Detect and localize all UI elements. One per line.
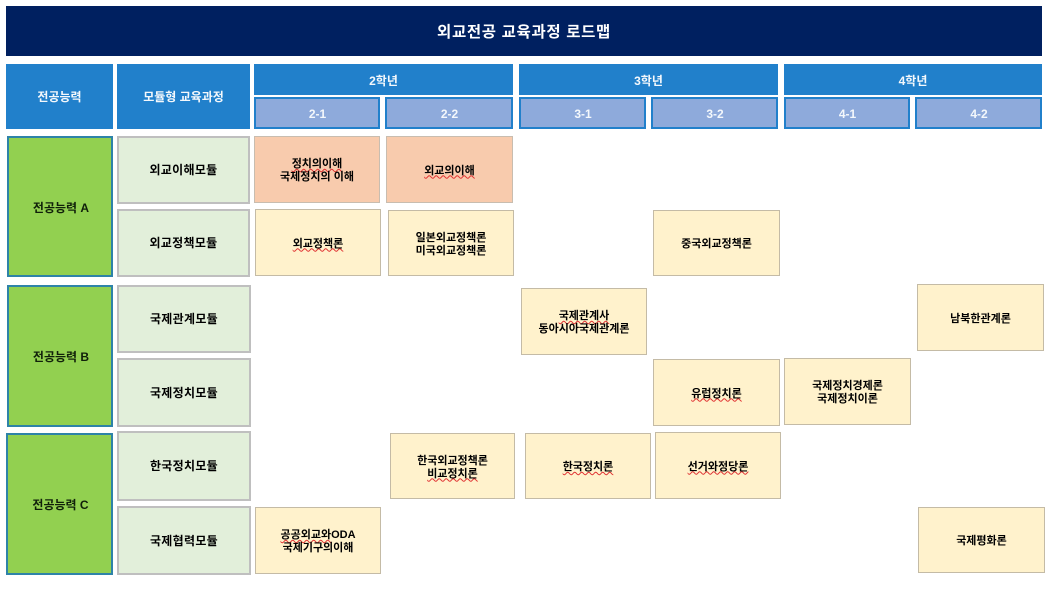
course: 공공외교와ODA / 국제기구의이해: 공공외교와ODA [280,529,356,541]
course: 중국외교정책론 [653,210,780,276]
semester 3-2 [651,97,778,129]
header: 모듈형 교육과정 [117,64,250,129]
course: 일본외교정책론 / 미국외교정책론: 일본외교정책론 [416,232,486,244]
semester 4-1: 4-1 [839,107,856,121]
course: 공공외교와ODA / 국제기구의이해: 국제기구의이해 [283,542,353,554]
course: 선거와정당론: 선거와정당론 [688,460,748,472]
course: 국제정치경제론 / 국제정치이론: 국제정치이론 [817,393,878,405]
semester 4-2: 4-2 [970,107,988,121]
competency C: 전공능력 C [32,498,89,512]
course: 유럽정치론: 유럽정치론 [691,388,742,400]
course: 선거와정당론 [655,432,781,499]
course: 정치의이해 / 국제정치의 이해: 정치의이해 [292,158,342,170]
course: 외교의이해 [386,136,513,203]
course: 외교정책론 [255,209,381,276]
course: 유럽정치론 [653,359,780,426]
header: 전공능력 [6,64,113,129]
title banner [6,6,1042,56]
course: 일본외교정책론 / 미국외교정책론 [388,210,514,276]
course: 한국정치론 [525,433,651,499]
module: 외교정책모듈: 외교정책모듈 [149,236,218,250]
semester 4-1 [784,97,910,129]
semester 2-1 [254,97,380,129]
module: 국제정치모듈: 국제정치모듈 [150,386,218,400]
course: 남북한관계론: 남북한관계론 [950,312,1011,324]
competency B: 전공능력 B [33,350,89,364]
module: 국제협력모듈: 국제협력모듈 [150,534,218,548]
course: 국제관계사 / 동아시아국제관계론 [521,288,647,355]
course: 국제평화론: 국제평화론 [956,535,1007,547]
course: 한국외교정책론 / 비교정치론: 비교정치론 [427,468,478,480]
semester 4-2 [915,97,1042,129]
module: 한국정치모듈 [117,431,251,501]
semester 2-1: 2-1 [309,107,326,121]
header: 3학년: 3학년 [634,74,663,88]
module: 외교이해모듈: 외교이해모듈 [149,163,218,177]
course: 국제정치경제론 / 국제정치이론 [784,358,911,425]
course: 중국외교정책론: 중국외교정책론 [681,238,752,250]
semester 2-2 [385,97,513,129]
course: 남북한관계론 [917,284,1044,351]
module: 국제협력모듈 [117,506,251,575]
module: 외교이해모듈 [117,136,250,204]
semester 3-1: 3-1 [574,107,592,121]
semester 2-2: 2-2 [441,107,458,121]
course: 정치의이해 / 국제정치의 이해: 국제정치의 이해 [280,171,354,183]
course: 공공외교와ODA / 국제기구의이해 [255,507,381,574]
title banner: 외교전공 교육과정 로드맵 [437,24,611,40]
course: 정치의이해 / 국제정치의 이해 [254,136,380,203]
course: 국제관계사 / 동아시아국제관계론: 동아시아국제관계론 [538,323,630,335]
course: 국제평화론 [918,507,1045,573]
course: 외교정책론: 외교정책론 [293,238,343,250]
semester 3-2: 3-2 [706,107,724,121]
competency A [7,136,113,277]
competency C [6,433,113,575]
course: 한국정치론: 한국정치론 [563,461,613,473]
course: 국제관계사 / 동아시아국제관계론: 국제관계사 [559,310,609,322]
course: 한국외교정책론 / 비교정치론: 한국외교정책론 [417,454,488,466]
module: 국제관계모듈: 국제관계모듈 [150,312,218,326]
course: 외교의이해: 외교의이해 [424,164,475,176]
competency B [7,285,113,427]
module: 국제정치모듈 [117,358,251,427]
header: 전공능력: 전공능력 [37,90,82,104]
course: 일본외교정책론 / 미국외교정책론: 미국외교정책론 [416,244,486,256]
module: 한국정치모듈: 한국정치모듈 [150,459,218,473]
header: 3학년 [519,64,778,95]
header: 4학년: 4학년 [899,74,927,88]
header: 2학년 [254,64,513,95]
header: 2학년: 2학년 [369,74,398,88]
course: 한국외교정책론 / 비교정치론 [390,433,515,499]
course: 국제정치경제론 / 국제정치이론: 국제정치경제론 [812,380,883,392]
header: 모듈형 교육과정: 모듈형 교육과정 [143,90,224,104]
module: 외교정책모듈 [117,209,250,277]
competency A: 전공능력 A [33,200,89,214]
module: 국제관계모듈 [117,285,251,353]
semester 3-1 [519,97,646,129]
header: 4학년 [784,64,1042,95]
